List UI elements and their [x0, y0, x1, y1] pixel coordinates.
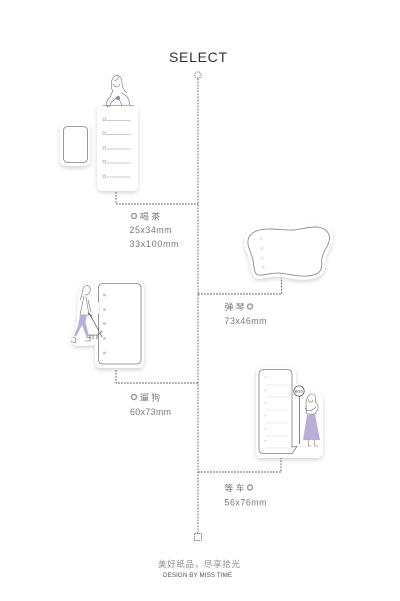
timeline axis: [194, 72, 202, 541]
footer: DESIGN BY MISS TIME: [163, 572, 232, 579]
label: dog walking sizes: 60x73mm: [130, 407, 171, 417]
illustration: waiting woman: [303, 394, 320, 446]
label: tea sizes: 33x100mm: [130, 239, 178, 249]
bullet dots: [103, 294, 106, 354]
sticky note: waiting for bus: [256, 367, 323, 458]
label: piano sizes: 弹琴: [224, 301, 245, 312]
illustration: bus stop sign: BUS: [295, 388, 303, 394]
label: dog walking sizes: 遛狗: [140, 392, 160, 402]
sticky note: small card: [60, 122, 90, 166]
label: dog walking sizes: [130, 392, 171, 417]
bullet dots: [260, 237, 265, 269]
label: waiting sizes: 等车: [224, 482, 245, 493]
ruled lines: [265, 377, 288, 448]
connector: piano: [198, 278, 282, 294]
footer: [158, 559, 240, 579]
title: SELECT: [169, 49, 227, 65]
checklist rows: [103, 118, 131, 178]
label: tea sizes: [130, 210, 178, 249]
sticky note: tea checklist: [97, 75, 138, 191]
label: tea sizes: 喝茶: [140, 210, 160, 222]
label: tea sizes: 25x34mm: [130, 225, 172, 235]
sticky note: dog walking: [71, 281, 144, 368]
footer: 美好纸品，尽享拾光: [158, 559, 240, 569]
connector: waiting for bus: [198, 458, 281, 472]
connector: tea: [116, 192, 198, 204]
label: waiting sizes: 56x76mm: [224, 498, 266, 508]
illustration: woman walking dog: [71, 286, 102, 343]
label: piano sizes: [224, 301, 266, 326]
sticky note: piano blob: [248, 227, 330, 276]
label: piano sizes: 73x46mm: [224, 316, 266, 326]
illustration: woman drinking tea: [103, 75, 134, 107]
connector: dog walking: [116, 370, 198, 383]
label: waiting sizes: [224, 482, 266, 508]
